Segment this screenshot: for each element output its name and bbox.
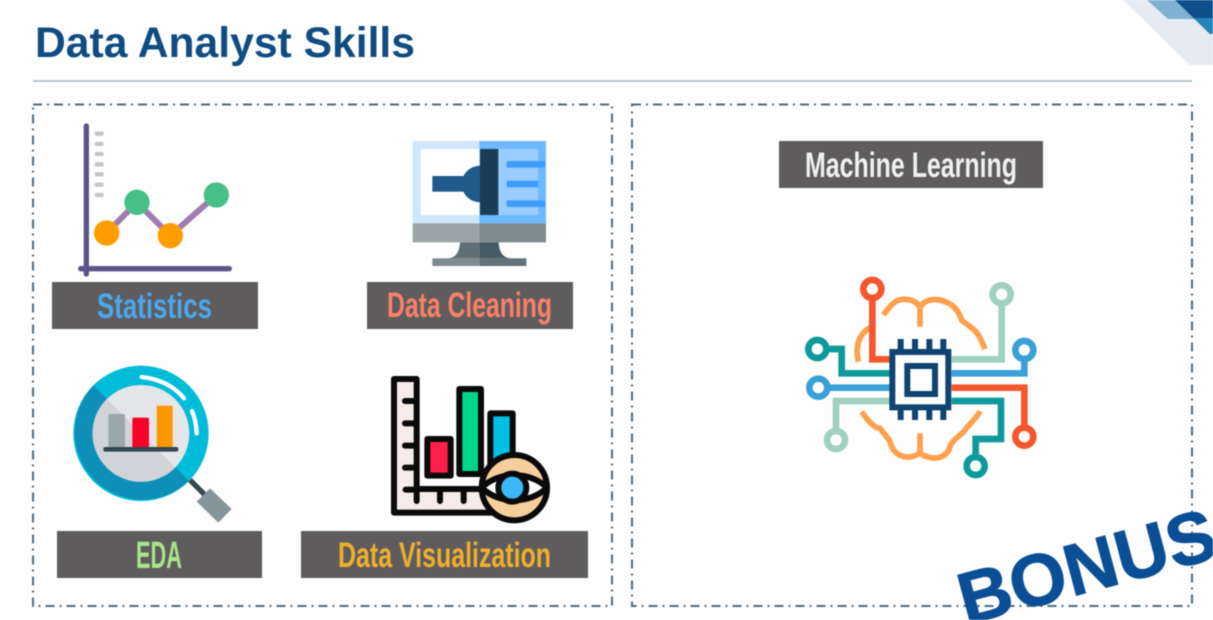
icon: data visualization chart with eye [394,379,547,520]
panel: machine learning [632,104,1192,606]
label: Data Visualization: Data Visualization [338,536,551,575]
label: Data Cleaning: Data Cleaning [387,286,552,325]
corner decoration [1123,0,1213,65]
icon: EDA magnifying glass [73,366,232,523]
title: Data Analyst Skills [35,19,415,67]
label: Statistics: Statistics [97,287,212,326]
icon: machine learning brain and chip [808,280,1033,475]
label: EDA [57,531,262,578]
icon: data cleaning monitor [413,141,546,266]
panel: core skills [33,104,612,606]
label: EDA: EDA [136,535,182,577]
label: Data Visualization [301,531,588,578]
label: Data Cleaning [367,282,573,329]
label: Statistics [52,282,258,329]
label: Machine Learning [779,141,1043,188]
label: Machine Learning: Machine Learning [805,146,1017,185]
icon: statistics line chart [81,126,229,274]
